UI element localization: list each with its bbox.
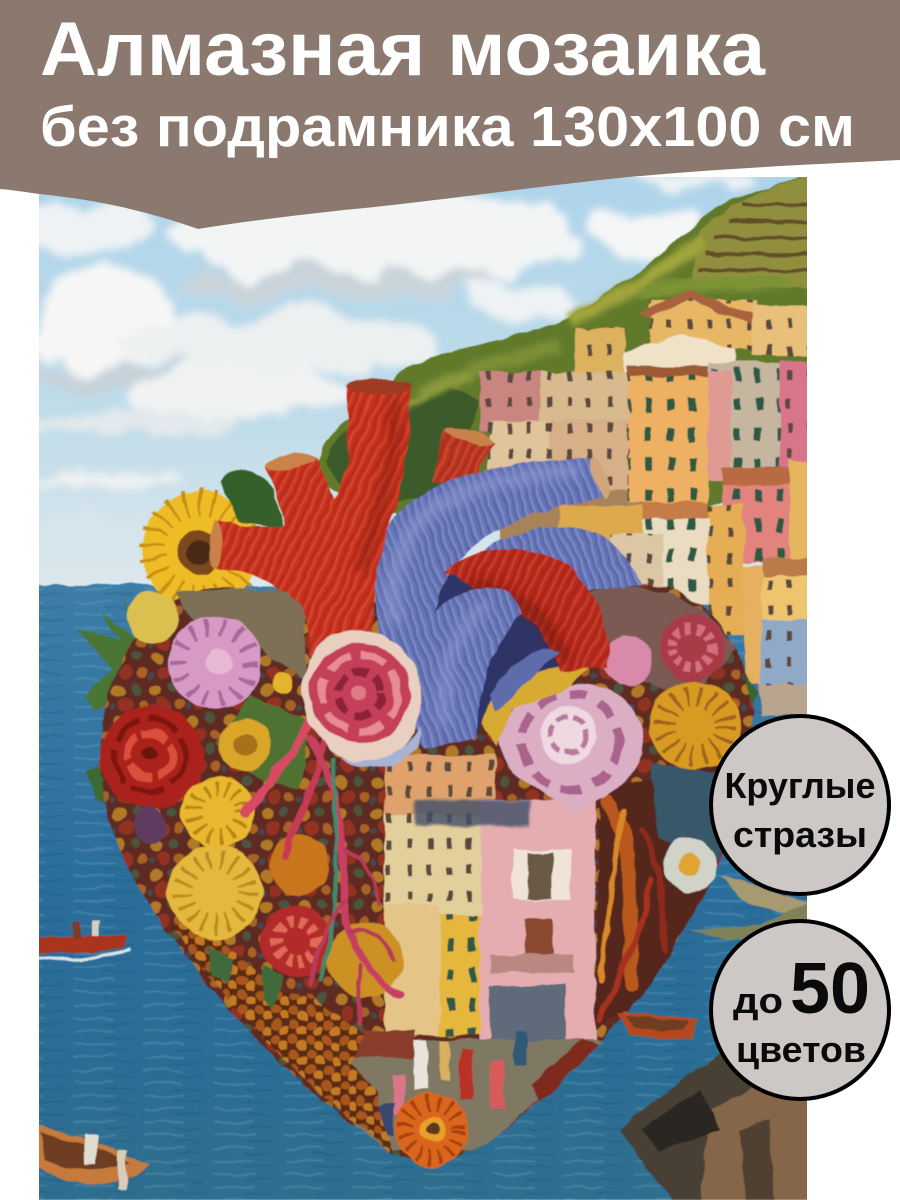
left lobe floral mosaic: [100, 587, 403, 1155]
veins pink and teal: [245, 710, 400, 1025]
flower: orange gold: [650, 681, 740, 771]
flower: yellow right of veins: [327, 922, 403, 998]
town buildings: [480, 290, 812, 715]
mosaic rim: [170, 925, 395, 1155]
subtitle: без подрамника 130х100 см: [40, 95, 855, 159]
vessel shadow backing: [385, 540, 600, 748]
veins red and orange: [600, 800, 665, 1020]
flower: pale daisy: [663, 838, 717, 892]
vessel: blue small: [490, 649, 560, 712]
vessel: blue lower: [411, 586, 522, 748]
vessel: blue pulmonary right: [475, 527, 642, 590]
mosaic: green leaves: [215, 695, 310, 790]
flower: orange cluster: [270, 835, 330, 895]
mosaic: upper right: [590, 587, 735, 700]
badge: up to 50 colours: [711, 921, 889, 1099]
yellow petals beside peony: [482, 665, 590, 745]
badge: up to 50 colours: цветов: [736, 1029, 866, 1070]
badge: up to 50 colours: до: [733, 980, 783, 1021]
banner: [0, 0, 900, 229]
painting: anatomical heart and coastal town: [20, 170, 820, 1200]
heart body: [100, 585, 753, 1165]
cut rose in aorta: [303, 629, 421, 768]
flower: crimson: [262, 907, 332, 977]
leaves and accents at lower left: [205, 945, 282, 1010]
vessel: aorta: [214, 385, 410, 655]
green hillside: [310, 170, 815, 540]
boat bottom left: [30, 1125, 148, 1190]
boat right: [617, 1012, 697, 1040]
bottom orange flower: [395, 1093, 469, 1167]
flower: red rose: [100, 705, 204, 809]
flower: pale yellow: [127, 591, 179, 643]
vessel openings: [210, 378, 615, 568]
flower: pink small: [603, 635, 653, 685]
painted scene: [20, 170, 820, 1200]
mosaic: lower right: [594, 766, 719, 1030]
badge: round rhinestones: стразы: [733, 814, 867, 855]
sunflower behind heart: [142, 492, 258, 608]
flower: golden: [182, 776, 254, 848]
vessel: blue large upper: [376, 458, 608, 662]
vessel: red branch: [432, 430, 496, 486]
clouds: [39, 177, 758, 493]
sea: [20, 585, 820, 1200]
flower: small yellow: [271, 673, 293, 695]
flower: cream yellow large: [168, 845, 262, 939]
shoreline right: [690, 875, 815, 945]
badge: up to 50 colours: 50: [790, 949, 870, 1029]
flower: pink peony: [168, 616, 262, 710]
green foliage around heart: [75, 469, 760, 805]
heart vessels: [210, 378, 642, 748]
flower: purple shade: [133, 808, 167, 842]
flower: large peony: [500, 684, 643, 815]
boat left middle: [30, 920, 130, 959]
vessel: red arch: [445, 549, 609, 672]
badge: round rhinestones: [711, 716, 889, 894]
flower: magenta: [659, 615, 725, 681]
rocks: [620, 1005, 815, 1200]
town scene inside heart: [340, 755, 610, 1150]
flower: yellow small: [219, 719, 271, 771]
sky: [39, 170, 807, 590]
title: Алмазная мозаика: [40, 7, 766, 92]
mosaic: upper left: [175, 587, 305, 680]
badge: round rhinestones: Круглые: [724, 765, 876, 806]
right lobe floral mosaic: [482, 587, 745, 1030]
orange beads: [279, 991, 366, 1064]
